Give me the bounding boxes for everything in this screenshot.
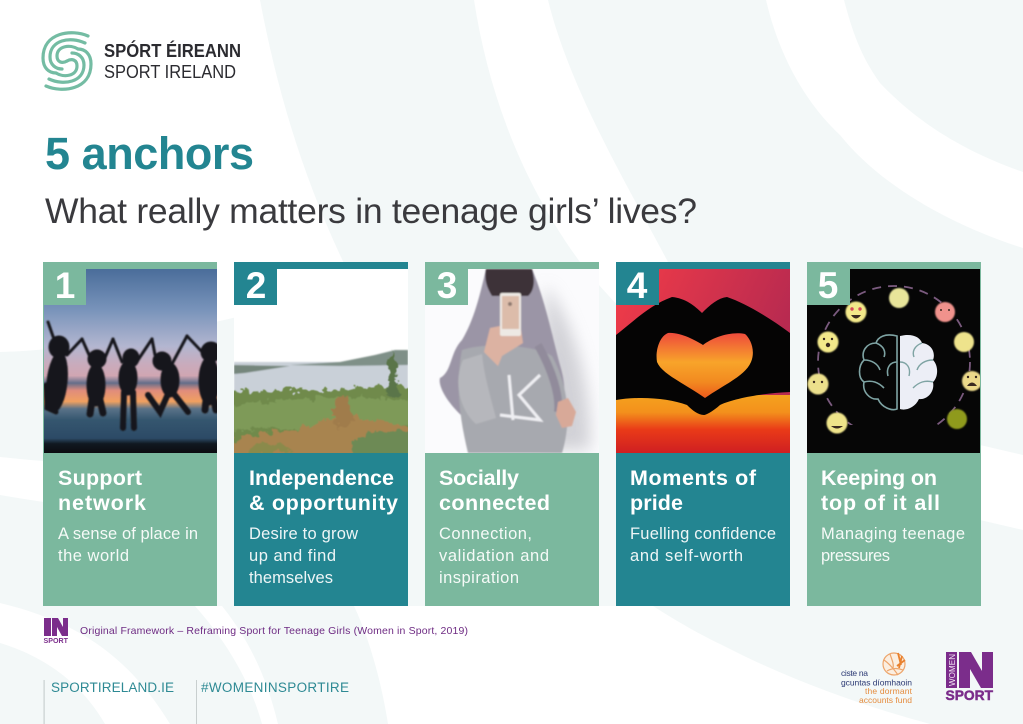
number tab 4 xyxy=(616,262,659,306)
card 4 description: Fuelling confidence xyxy=(630,525,776,543)
card 1 description xyxy=(58,525,198,565)
source note: Original Framework – Reframing Sport for Teenage Girls (Women in Sport, 2019) xyxy=(80,625,468,637)
fund name English: accounts fund xyxy=(859,695,912,705)
panel: card 4 moments of pride xyxy=(616,262,790,606)
card 3 description: validation and xyxy=(439,547,549,565)
number tab 2 xyxy=(234,262,277,306)
card 2 description: themselves xyxy=(249,569,333,587)
logo: Women in Sport: WOMEN xyxy=(948,654,957,686)
card 1 description: A sense of place in xyxy=(58,525,198,543)
card 3 heading: Socially xyxy=(439,466,519,490)
photo: brain with circle of emojis xyxy=(807,269,982,453)
card 5 description: pressures xyxy=(821,547,890,565)
number tab 1: 1 xyxy=(55,265,75,306)
footer: hashtag: #WOMENINSPORTIRE xyxy=(201,680,349,695)
photo: girl taking a mirror selfie xyxy=(425,269,599,453)
card 4 description xyxy=(630,525,776,565)
logo: dormant accounts fund xyxy=(841,653,913,705)
footer: website link xyxy=(44,680,174,724)
card 3 description: Connection, xyxy=(439,525,532,543)
number tab 4: 4 xyxy=(627,265,648,306)
number tab 3 xyxy=(425,262,468,306)
brain left half xyxy=(860,335,897,410)
icon: orange globe xyxy=(883,653,905,675)
logo wordmark English: SPORT IRELAND xyxy=(104,61,236,82)
card 3 description xyxy=(439,525,549,587)
icon: small Women in Sport logo xyxy=(44,618,69,645)
number tab 1 xyxy=(43,262,86,306)
card 1 description: the world xyxy=(58,547,129,565)
card 5 description xyxy=(821,525,965,565)
panel: card 3 socially connected xyxy=(425,262,599,606)
logo wordmark Irish: SPÓRT ÉIREANN xyxy=(104,40,241,61)
card 1 heading: network xyxy=(58,491,146,515)
card 2 heading: & opportunity xyxy=(249,491,398,515)
card 5 heading: Keeping on xyxy=(821,466,937,490)
card 5 heading: top of it all xyxy=(821,491,940,515)
fund name Irish xyxy=(841,668,912,688)
card 2 description: Desire to grow xyxy=(249,525,358,543)
card 4 heading xyxy=(630,466,757,515)
fund name Irish: ciste na xyxy=(841,668,868,678)
footer: website link: SPORTIRELAND.IE xyxy=(51,680,174,695)
card 4 description: and self-worth xyxy=(630,547,743,565)
card 3 description: inspiration xyxy=(439,569,519,587)
card 2 heading xyxy=(249,466,398,515)
subtitle: What really matters in teenage girls’ lives? xyxy=(45,191,697,231)
logo: Sport Ireland xyxy=(43,33,241,89)
panel: card 5 keeping on top of it all xyxy=(807,262,982,606)
number tab 5: 5 xyxy=(818,265,838,306)
photo: lake landscape xyxy=(234,269,408,453)
panel: card 1 support network xyxy=(43,262,221,606)
card 4 heading: pride xyxy=(630,491,683,515)
card 5 description: Managing teenage xyxy=(821,525,965,543)
card 3 heading: connected xyxy=(439,491,550,515)
card 2 description xyxy=(249,525,358,587)
logo: Women in Sport xyxy=(946,652,993,703)
fund name English: the dormant xyxy=(865,686,913,696)
icon: small Women in Sport logo: SPORT xyxy=(44,638,69,645)
card 2 heading: Independence xyxy=(249,466,394,490)
number tab 5 xyxy=(807,262,850,306)
icon: spiral mark xyxy=(43,33,91,89)
number tab 2: 2 xyxy=(246,265,266,306)
photo: heart hands at sunset xyxy=(616,269,790,453)
brain right half xyxy=(900,335,937,410)
card 1 heading xyxy=(58,466,146,515)
fund name Irish: gcuntas díomhaoin xyxy=(841,678,912,688)
card 4 heading: Moments of xyxy=(630,466,757,490)
photo: girls jumping at sunset xyxy=(44,269,221,453)
title: 5 anchors xyxy=(45,128,254,179)
card 1 heading: Support xyxy=(58,466,142,490)
logo: Women in Sport: SPORT xyxy=(946,687,993,703)
fund name English xyxy=(859,686,913,705)
panel: card 2 independence and opportunity xyxy=(226,262,416,606)
card 2 description: up and find xyxy=(249,547,336,565)
number tab 3: 3 xyxy=(437,265,457,306)
card 3 heading xyxy=(439,466,550,515)
card 5 heading xyxy=(821,466,940,515)
